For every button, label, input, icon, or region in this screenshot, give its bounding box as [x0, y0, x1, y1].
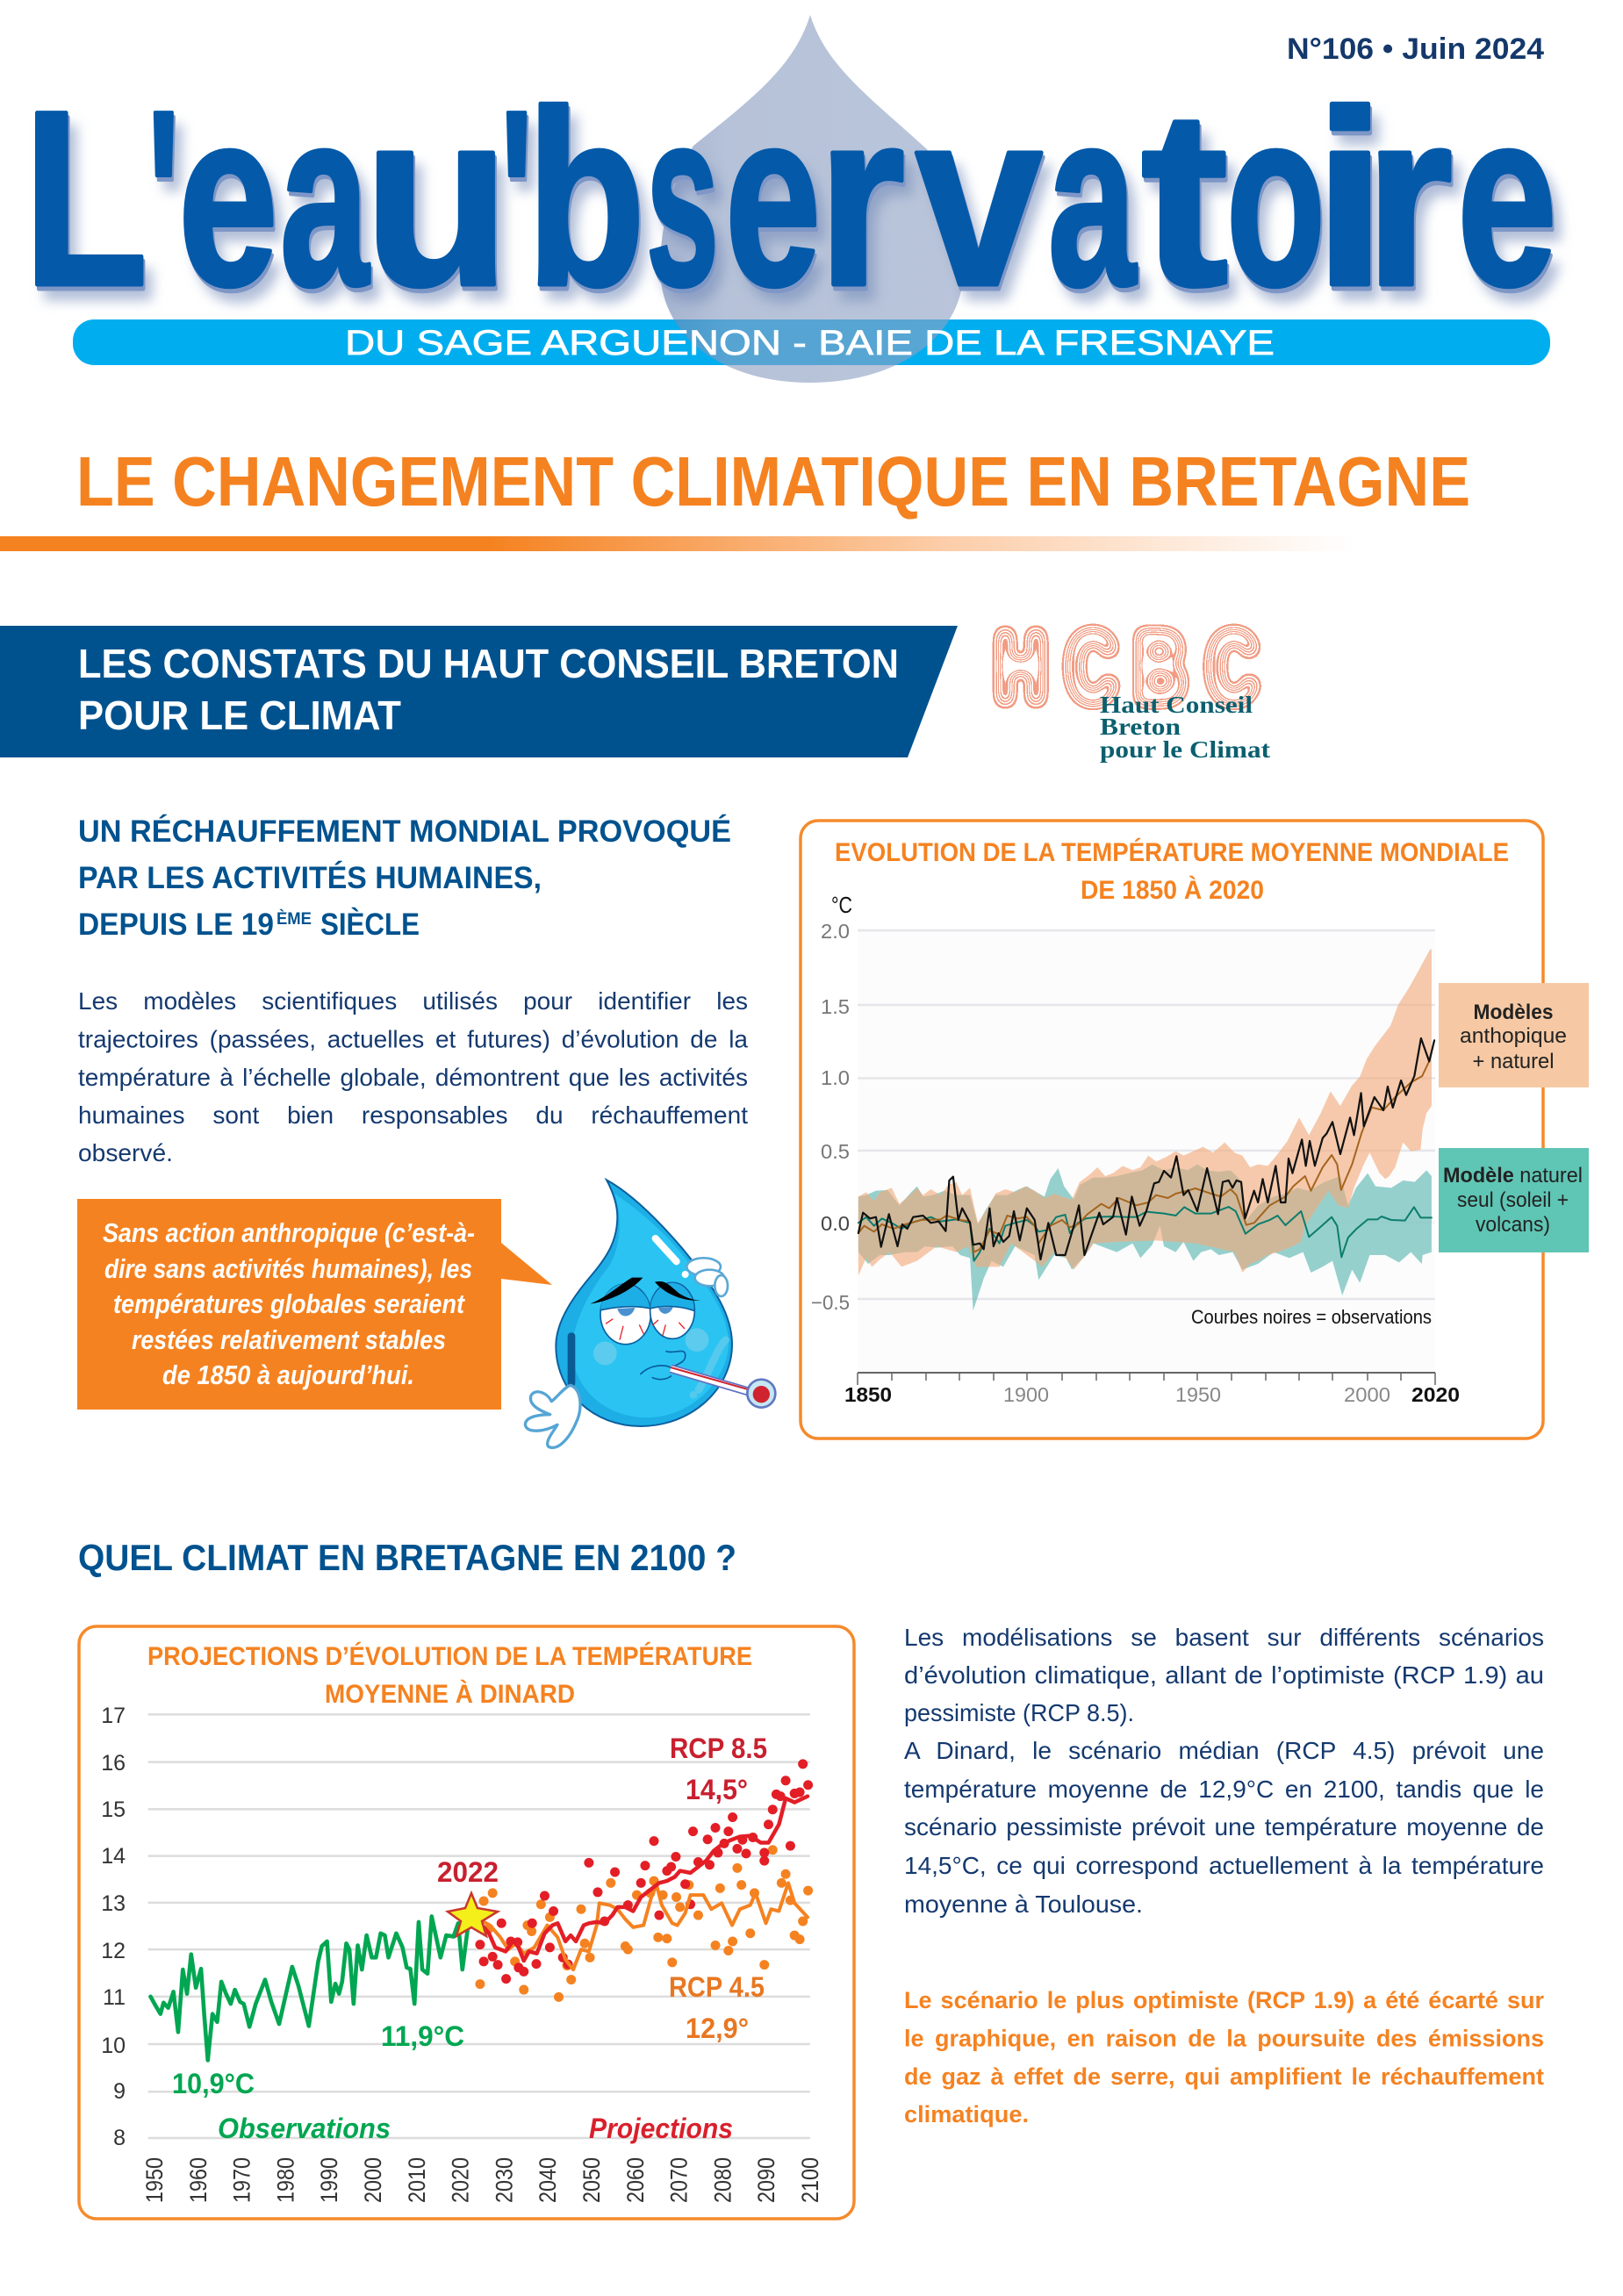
- paragraph: modélisations: température moyenne de 12,9°C en 2100, tandis que le: [904, 1776, 1544, 1803]
- HCBC logo: Breton: [1100, 714, 1181, 740]
- icon: sick water drop mascot: [525, 1180, 775, 1447]
- subheading: quel climat en Bretagne: QUEL CLIMAT EN BRETAGNE EN 2100 ?: [78, 1537, 736, 1578]
- masthead title: a: [280, 60, 370, 338]
- line chart: temperature anomalies: [811, 892, 1460, 1406]
- line chart: temperature projections: RCP 8.5: [670, 1733, 767, 1764]
- line chart: temperature projections: 2020: [448, 2157, 474, 2203]
- line chart: temperature projections: RCP 4.5: [669, 1971, 765, 2003]
- callout: sans action anthropique: dire sans activités humaines), les: [104, 1253, 472, 1284]
- line chart: temperature projections: 11,9°C: [381, 2020, 464, 2052]
- subheading: réchauffement mondial: [78, 814, 731, 942]
- line chart: temperature projections: 2080: [709, 2157, 736, 2203]
- line chart: temperature projections: 1950: [141, 2157, 168, 2203]
- paragraph: modèles scientifiques: trajectoires (passées, actuelles et futures) d’évolution de la: [78, 1025, 748, 1053]
- paragraph: modélisations: pessimiste (RCP 8.5).: [904, 1699, 1134, 1726]
- legend: natural model: seul (soleil +: [1457, 1188, 1569, 1212]
- line chart: temperature projections: 2090: [753, 2157, 779, 2203]
- line chart: temperature anomalies: 1.0: [821, 1066, 850, 1089]
- chart title: DE 1850 À 2020: [1081, 875, 1264, 905]
- line chart: temperature anomalies: 0.0: [821, 1212, 850, 1235]
- line chart: temperature projections: Projections: [589, 2113, 733, 2144]
- masthead title: [23, 60, 1557, 338]
- HCBC logo: pour le Climat: [1100, 736, 1270, 763]
- paragraph: modèles scientifiques: humaines sont bien responsables du réchauffement: [78, 1101, 748, 1129]
- paragraph: modèles scientifiques: température à l’échelle globale, démontrent que les activités: [78, 1064, 748, 1091]
- paragraph: RCP 1.9 note: [904, 1987, 1544, 2127]
- masthead title: a: [1048, 60, 1137, 338]
- masthead subtitle: DU SAGE ARGUENON - BAIE DE LA FRESNAYE: [345, 324, 1275, 362]
- line chart: temperature anomalies: 1.5: [821, 995, 850, 1018]
- masthead title: L: [23, 60, 147, 338]
- legend: anthropic and natural models: + naturel: [1473, 1050, 1554, 1073]
- paragraph: modélisations: 14,5°C, ce qui correspond actuellement à la température: [904, 1852, 1544, 1879]
- line chart: temperature projections: 14,5°: [686, 1774, 748, 1805]
- paragraph: modèles scientifiques: observé.: [78, 1139, 173, 1166]
- line chart: temperature projections: 10: [101, 2034, 126, 2058]
- masthead pill: [73, 319, 1550, 365]
- chart title: EVOLUTION DE LA TEMPÉRATURE MOYENNE MONDIALE: [835, 837, 1509, 867]
- issue number: N°106 • Juin 2024: [1287, 32, 1544, 66]
- section banner: POUR LE CLIMAT: [78, 692, 401, 738]
- HCBC logo: Haut Conseil: [1100, 692, 1253, 718]
- paragraph: modèles scientifiques: Les modèles scientifiques utilisés pour identifier les: [78, 987, 748, 1015]
- line chart: temperature projections: 1960: [185, 2157, 212, 2203]
- line chart: temperature projections: 1990: [316, 2157, 342, 2203]
- subheading: réchauffement mondial: SIÈCLE: [320, 907, 420, 942]
- line chart: temperature anomalies: 2.0: [821, 920, 850, 943]
- line chart: temperature anomalies: 1850: [844, 1383, 892, 1406]
- masthead title: e: [178, 60, 278, 338]
- paragraph: modélisations: [904, 1624, 1544, 1918]
- paragraph: modélisations: moyenne à Toulouse.: [904, 1891, 1143, 1918]
- legend: anthropic and natural models: Modèles: [1473, 1001, 1554, 1024]
- water drop background: [660, 15, 964, 383]
- section banner: [0, 626, 958, 757]
- masthead title: b: [527, 60, 645, 338]
- paragraph: modélisations: d’évolution climatique, allant de l’optimiste (RCP 1.9) au: [904, 1661, 1544, 1689]
- callout: sans action anthropique: de 1850 à aujourd’hui.: [162, 1360, 414, 1390]
- masthead title: u: [363, 60, 509, 338]
- line chart: temperature projections: 1970: [229, 2157, 255, 2203]
- line chart: temperature anomalies: Courbes noires = observations: [1191, 1306, 1432, 1328]
- paragraph: modélisations: A Dinard, le scénario médian (RCP 4.5) prévoit une: [904, 1737, 1544, 1764]
- legend: anthropic and natural models: [1439, 983, 1589, 1087]
- paragraph: modèles scientifiques: [78, 987, 748, 1166]
- paragraph: RCP 1.9 note: climatique.: [904, 2101, 1029, 2127]
- legend: anthropic and natural models: anthopique: [1460, 1024, 1567, 1048]
- subheading: réchauffement mondial: UN RÉCHAUFFEMENT MONDIAL PROVOQUÉ: [78, 814, 731, 849]
- chart title: PROJECTIONS D’ÉVOLUTION DE LA TEMPÉRATURE: [147, 1641, 752, 1671]
- masthead title: r: [1366, 60, 1453, 338]
- masthead title: s: [646, 60, 719, 338]
- paragraph: RCP 1.9 note: le graphique, en raison de la poursuite des émissions: [904, 2026, 1544, 2052]
- callout: sans action anthropique: [77, 1199, 552, 1410]
- line chart: temperature anomalies: 2020: [1411, 1383, 1460, 1406]
- line chart: temperature projections: 2010: [404, 2157, 430, 2203]
- paragraph: RCP 1.9 note: Le scénario le plus optimiste (RCP 1.9) a été écarté sur: [904, 1987, 1544, 2013]
- chart title: [147, 1641, 752, 1709]
- panel: projections at Dinard: [79, 1626, 854, 2219]
- masthead title: o: [1226, 60, 1325, 338]
- masthead title: t: [1141, 60, 1228, 338]
- subheading: réchauffement mondial: PAR LES ACTIVITÉS HUMAINES,: [78, 860, 542, 895]
- section banner: LES CONSTATS DU HAUT CONSEIL BRETON: [78, 641, 899, 686]
- legend: natural model: volcans): [1476, 1213, 1550, 1237]
- line chart: temperature projections: 13: [101, 1891, 126, 1916]
- line chart: temperature projections: 11: [103, 1985, 126, 2010]
- panel: evolution of mean global temperature: [801, 821, 1543, 1439]
- main heading: LE CHANGEMENT CLIMATIQUE EN BRETAGNE: [76, 442, 1470, 520]
- line chart: temperature projections: 8: [113, 2126, 126, 2150]
- line chart: temperature projections: 12,9°: [686, 2013, 749, 2044]
- line chart: temperature anomalies: °C: [831, 892, 852, 918]
- masthead title: e: [1457, 60, 1557, 338]
- callout: sans action anthropique: restées relativement stables: [132, 1324, 446, 1355]
- paragraph: modélisations: scénario pessimiste prévoit une température moyenne de: [904, 1813, 1544, 1840]
- line chart: temperature projections: [101, 1704, 823, 2203]
- line chart: temperature projections: 9: [113, 2079, 126, 2104]
- line chart: temperature anomalies: −0.5: [811, 1291, 850, 1314]
- callout: sans action anthropique: températures globales seraient: [113, 1288, 465, 1319]
- line chart: temperature projections: 2100: [797, 2157, 823, 2203]
- line chart: temperature projections: 10,9°C: [172, 2068, 255, 2099]
- line chart: temperature anomalies: 1900: [1003, 1383, 1049, 1406]
- line chart: temperature projections: 12: [101, 1939, 126, 1963]
- line chart: temperature projections: 2050: [578, 2157, 605, 2203]
- subheading: réchauffement mondial: DEPUIS LE 19: [78, 908, 274, 942]
- HCBC logo: HCBC: [995, 611, 1258, 725]
- line chart: temperature projections: 2040: [535, 2157, 561, 2203]
- line chart: temperature projections: 2000: [360, 2157, 386, 2203]
- line chart: temperature projections: Observations: [218, 2113, 391, 2144]
- line chart: temperature projections: 15: [101, 1797, 126, 1822]
- line chart: temperature projections: 14: [101, 1844, 126, 1869]
- line chart: temperature projections: 2070: [666, 2157, 693, 2203]
- line chart: temperature projections: 17: [101, 1704, 126, 1728]
- line chart: temperature projections: 16: [101, 1751, 126, 1776]
- line chart: temperature anomalies: 0.5: [821, 1140, 850, 1163]
- masthead title: v: [916, 60, 1044, 338]
- paragraph: modélisations: Les modélisations se basent sur différents scénarios: [904, 1624, 1544, 1651]
- line chart: temperature anomalies: 1950: [1175, 1383, 1221, 1406]
- masthead title: r: [818, 60, 905, 338]
- masthead title: ': [500, 60, 533, 338]
- masthead title: i: [1314, 60, 1387, 338]
- chart title: [835, 837, 1509, 905]
- paragraph: RCP 1.9 note: de gaz à effet de serre, qui amplifient le réchauffement: [904, 2063, 1544, 2090]
- line chart: temperature projections: 2060: [622, 2157, 649, 2203]
- masthead title: ': [147, 60, 179, 338]
- legend: natural model: [1439, 1148, 1589, 1252]
- callout: sans action anthropique: Sans action anthropique (c’est-à-: [103, 1217, 475, 1248]
- legend: natural model: Modèle naturel: [1443, 1164, 1583, 1187]
- masthead title: e: [725, 60, 821, 338]
- orange gradient rule: [0, 536, 1356, 551]
- line chart: temperature projections: 2022: [437, 1856, 499, 1888]
- line chart: temperature projections: 1980: [272, 2157, 298, 2203]
- chart title: MOYENNE À DINARD: [325, 1679, 575, 1709]
- line chart: temperature projections: 2030: [491, 2157, 517, 2203]
- subheading: réchauffement mondial: ÈME: [276, 909, 312, 929]
- line chart: temperature anomalies: 2000: [1344, 1383, 1390, 1406]
